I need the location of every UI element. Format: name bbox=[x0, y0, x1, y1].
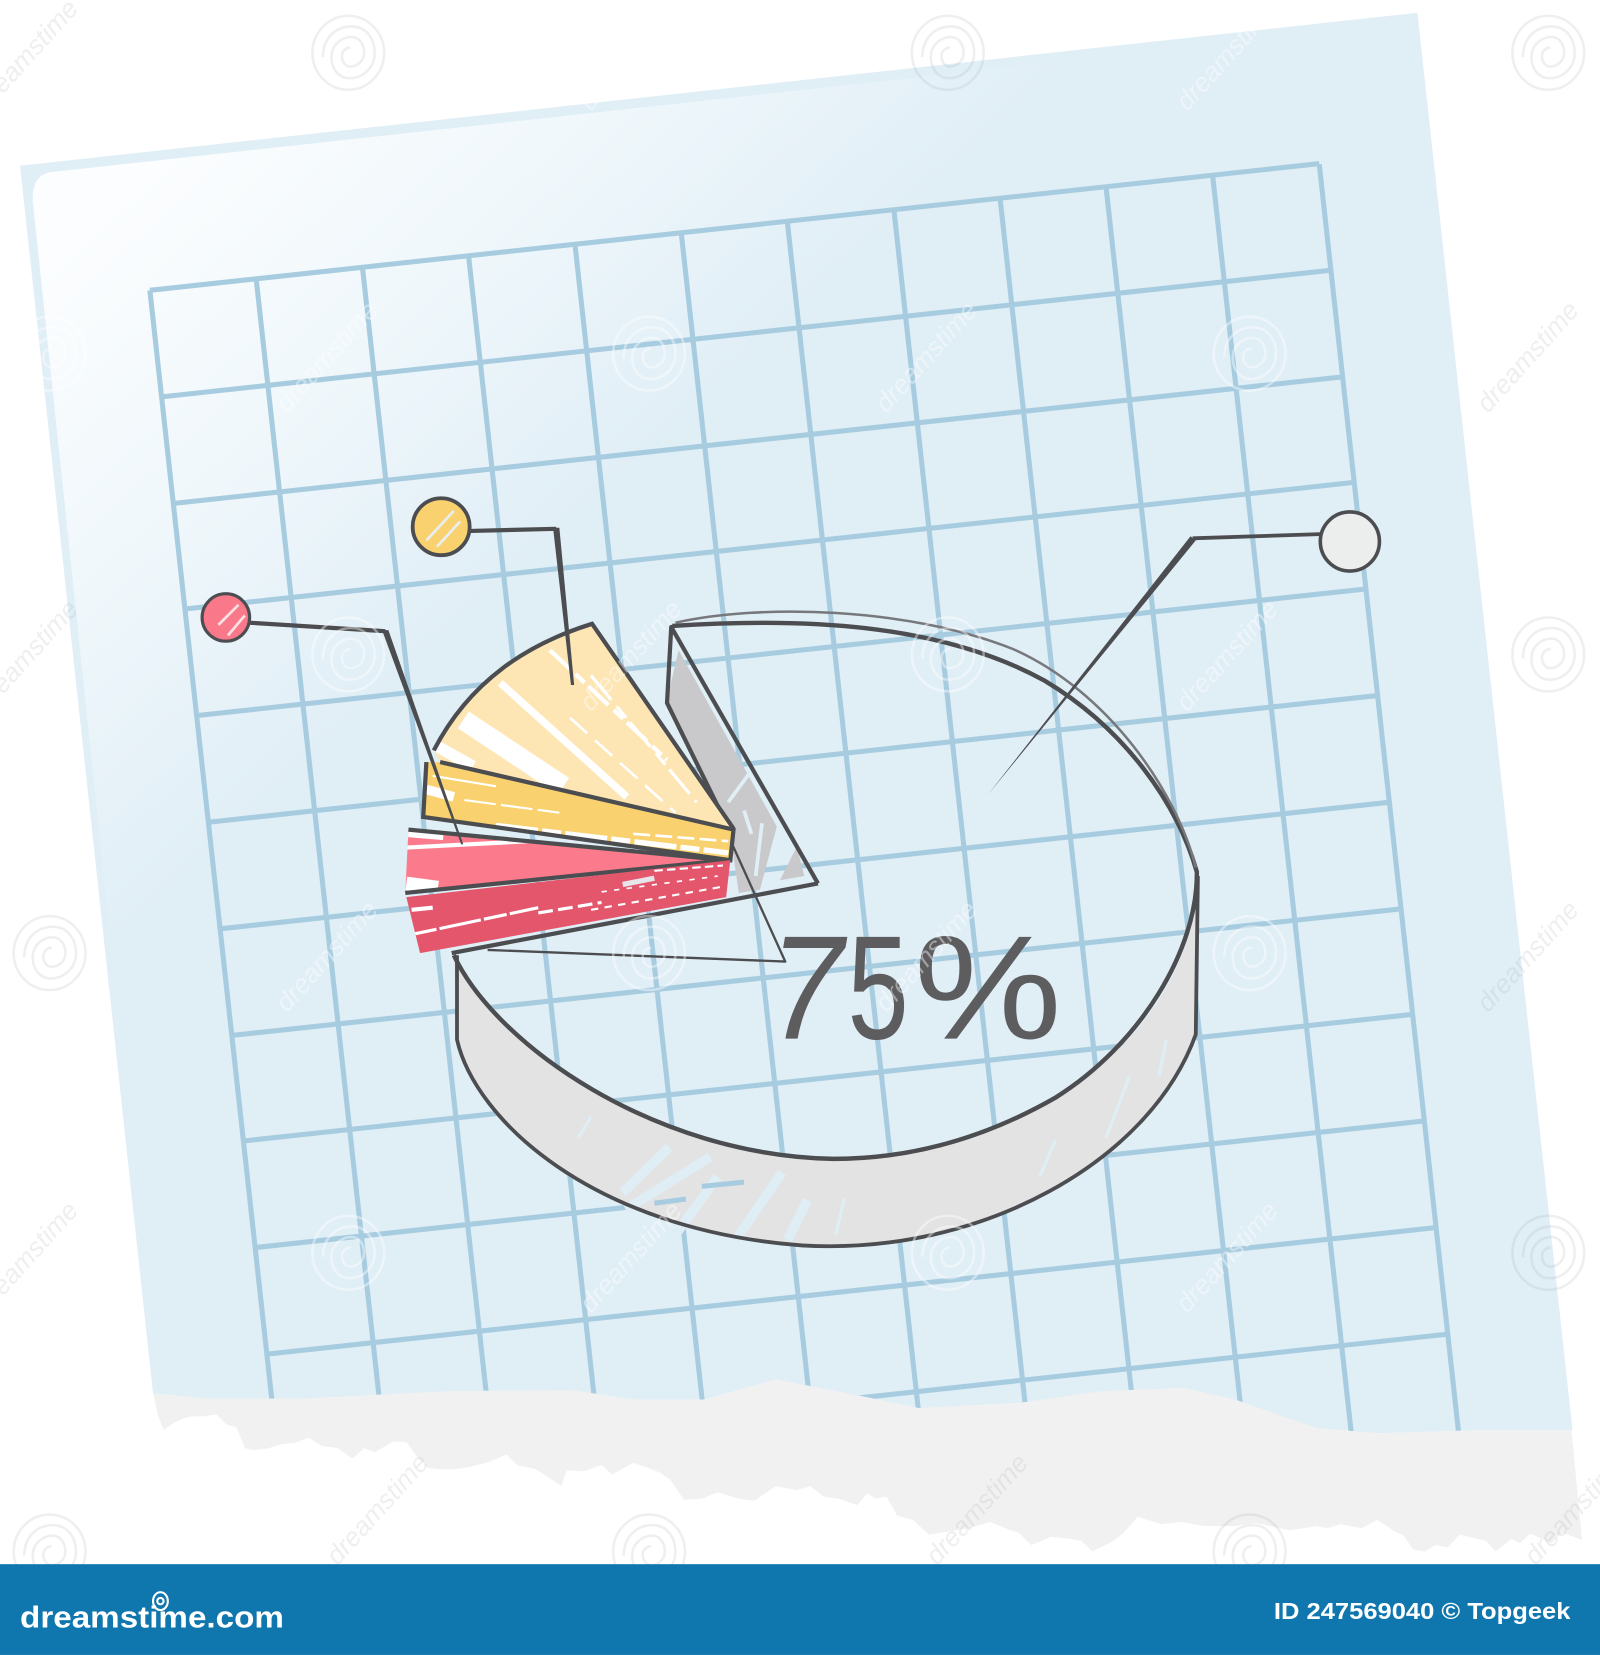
watermark text on white: dreamstime bbox=[1470, 295, 1585, 418]
watermark text on white: dreamstime bbox=[919, 1448, 1034, 1570]
pie slice: yellow bbox=[423, 762, 734, 860]
pie outline bbox=[452, 612, 1198, 1246]
watermark text on white: dreamstime bbox=[1470, 895, 1585, 1017]
percentage label bbox=[769, 906, 1062, 1071]
icon: pink marker with leader line bbox=[202, 594, 463, 844]
footer bar bbox=[0, 1564, 1600, 1655]
footer credit: ID 247569040 © Topgeek bbox=[1274, 1598, 1571, 1624]
percentage label: 5 bbox=[847, 906, 909, 1071]
watermark text on paper: dreamstime bbox=[1169, 1196, 1284, 1318]
pie slice: pink bbox=[405, 830, 726, 893]
grid bbox=[150, 164, 1464, 1478]
watermark text on paper: dreamstime bbox=[269, 295, 384, 418]
icon: logo spiral bbox=[153, 1592, 168, 1610]
watermark text on paper: dreamstime bbox=[869, 295, 983, 418]
watermark text on paper: dreamstime bbox=[573, 1196, 688, 1318]
watermark text on paper: dreamstime bbox=[1169, 594, 1284, 716]
watermark text on paper: dreamstime bbox=[269, 895, 384, 1017]
footer logo: dreamstime.com bbox=[20, 1600, 284, 1634]
watermark spirals on paper bbox=[14, 317, 1285, 1290]
watermark text on paper bbox=[269, 0, 1284, 1318]
pie cut face bbox=[667, 627, 818, 893]
percentage label: 7 bbox=[769, 906, 848, 1071]
watermark text on paper: dreamstime bbox=[869, 895, 983, 1017]
torn paper edge bbox=[153, 1379, 1582, 1552]
percentage label: % bbox=[914, 906, 1062, 1071]
watermark text on white: dreamstime bbox=[320, 1448, 434, 1570]
icon: grey marker with leader line bbox=[988, 512, 1379, 795]
icon: yellow marker with leader line bbox=[413, 498, 574, 685]
pie side wall bbox=[454, 876, 1198, 1246]
watermark text on paper: dreamstime bbox=[573, 594, 688, 716]
pie slice: red bbox=[406, 860, 730, 953]
pie slice: pale yellow bbox=[434, 624, 734, 829]
